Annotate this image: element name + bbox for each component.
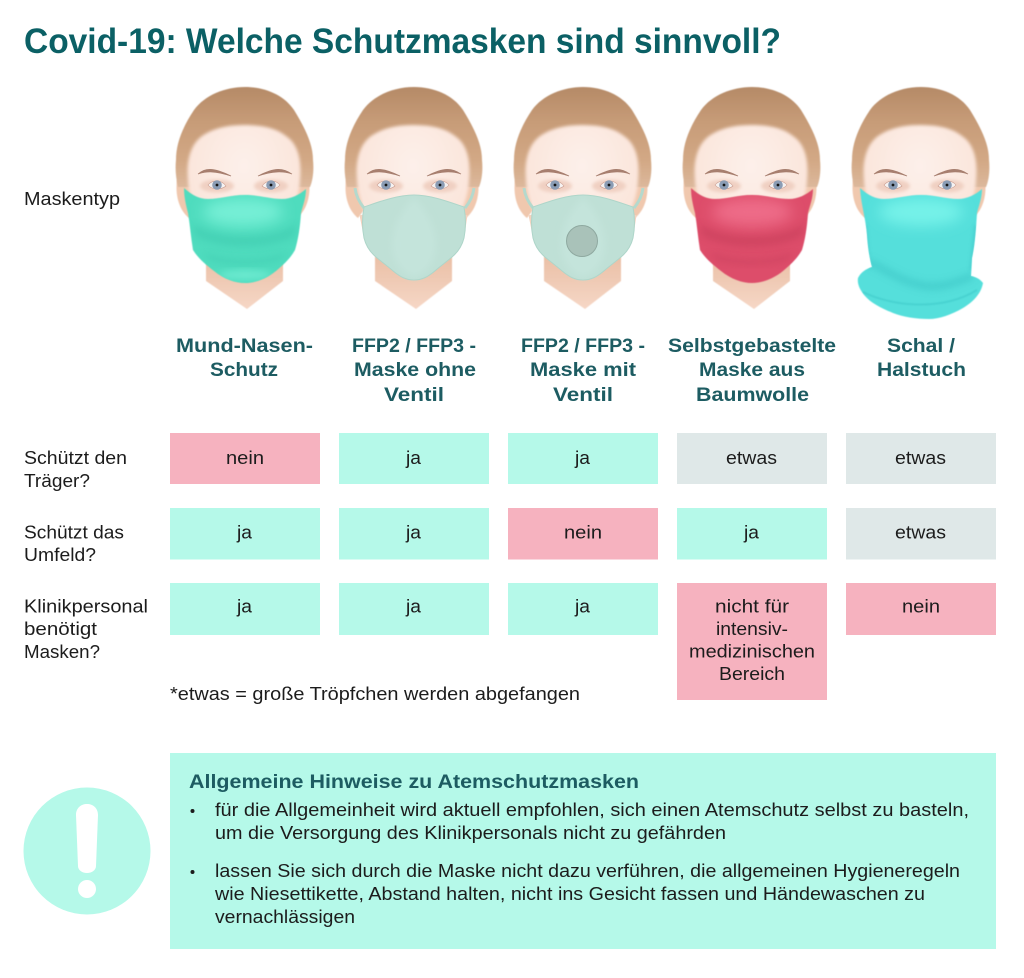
column label: Schal / Halstuch: Halstuch [877, 359, 966, 381]
illustration: face with FFP mask without valve [345, 87, 482, 309]
table row: Schützt den Träger: etwas [726, 447, 777, 468]
table row: Schützt das Umfeld: ja [743, 522, 760, 542]
column label: FFP2 / FFP3 - Maske mit Ventil [521, 335, 645, 406]
bullet 1: um die Versorgung des Klinikpersonals nicht zu gefährden [215, 822, 726, 843]
icon: exclamation mark [24, 788, 150, 914]
table row: Klinikpersonal: medizinischen [689, 640, 815, 662]
row label: Klinikpersonal benötigt Masken?: benötigt [24, 618, 97, 639]
illustration: face with FFP mask with valve [514, 87, 651, 309]
bullet 2: lassen Sie sich durch die Maske nicht dazu verführen, die allgemeinen Hygieneregeln [215, 860, 960, 881]
row label: Maskentyp: Maskentyp [24, 188, 120, 209]
table row: Schützt das Umfeld: etwas [895, 522, 946, 542]
illustration: face with homemade cotton mask [683, 87, 820, 309]
row label: Klinikpersonal benötigt Masken? [24, 596, 148, 662]
bullet 1 [190, 799, 969, 843]
table row: Schützt den Träger: nein [226, 447, 264, 468]
table row: Klinikpersonal: nein [902, 596, 940, 616]
column label: FFP2 / FFP3 - Maske mit Ventil: Ventil [553, 384, 613, 406]
column label: FFP2 / FFP3 - Maske ohne Ventil: FFP2 / FFP3 - [352, 335, 476, 357]
table row: Schützt das Umfeld: ja [236, 522, 253, 542]
row label: Schützt den Träger?: Schützt den [24, 447, 127, 468]
column label: FFP2 / FFP3 - Maske ohne Ventil: Maske ohne [354, 359, 476, 381]
column label: Selbstgebastelte Maske aus Baumwolle: Maske aus [699, 359, 805, 381]
column label: Mund-Nasen-Schutz: Mund-Nasen- [176, 335, 313, 357]
panel heading: Allgemeine Hinweise zu Atemschutzmasken [189, 771, 639, 793]
table row: Klinikpersonal: intensiv- [716, 618, 788, 639]
column label: FFP2 / FFP3 - Maske mit Ventil: Maske mit [530, 359, 637, 381]
column label: Selbstgebastelte Maske aus Baumwolle: Baumwolle [696, 384, 809, 406]
column label: FFP2 / FFP3 - Maske ohne Ventil [352, 335, 476, 406]
title: Covid-19: Welche Schutzmasken sind sinnvoll? [24, 21, 781, 61]
column label: Mund-Nasen-Schutz: Schutz [210, 359, 278, 381]
icon: valve [566, 226, 598, 256]
row label: Schützt das Umfeld?: Schützt das [24, 522, 124, 542]
column label: Schal / Halstuch: Schal / [887, 335, 956, 357]
bullet 2: vernachlässigen [215, 906, 355, 927]
row label: Klinikpersonal benötigt Masken?: Masken? [24, 641, 100, 662]
illustration: face with scarf [852, 87, 989, 319]
table row: Schützt den Träger: ja [405, 447, 422, 468]
row label: Schützt das Umfeld?: Umfeld? [24, 544, 96, 565]
table row: Schützt das Umfeld: ja [405, 522, 422, 542]
table row: Klinikpersonal: ja [574, 596, 591, 616]
table row: Schützt den Träger [170, 433, 996, 484]
row label: Schützt das Umfeld? [24, 522, 124, 565]
bullet 1: für die Allgemeinheit wird aktuell empfohlen, sich einen Atemschutz selbst zu basteln, [215, 799, 969, 820]
column label: Schal / Halstuch [877, 335, 966, 381]
table row: Klinikpersonal: ja [236, 596, 253, 616]
illustration: face with surgical mask [176, 87, 313, 309]
footnote: *etwas = große Tröpfchen werden abgefangen [170, 683, 580, 704]
column label: Selbstgebastelte Maske aus Baumwolle [668, 335, 836, 406]
table row: Schützt den Träger: etwas [895, 447, 946, 468]
column label: FFP2 / FFP3 - Maske ohne Ventil: Ventil [384, 384, 444, 406]
table row: Klinikpersonal: ja [405, 596, 422, 616]
column label: Selbstgebastelte Maske aus Baumwolle: Selbstgebastelte [668, 335, 836, 357]
table row: Schützt das Umfeld [170, 508, 996, 560]
table row: Schützt den Träger: ja [574, 447, 591, 468]
table row: Klinikpersonal: nicht für [715, 596, 789, 616]
column label: FFP2 / FFP3 - Maske mit Ventil: FFP2 / FFP3 - [521, 335, 645, 357]
row label: Schützt den Träger?: Träger? [24, 470, 90, 491]
column label: Mund-Nasen-Schutz [176, 335, 313, 381]
table row: Schützt das Umfeld: nein [564, 522, 602, 542]
table row: Klinikpersonal: Bereich [719, 663, 785, 684]
bullet 2: wie Niesettikette, Abstand halten, nicht ins Gesicht fassen und Händewaschen zu [214, 883, 925, 904]
row label: Schützt den Träger? [24, 447, 127, 491]
row label: Klinikpersonal benötigt Masken?: Klinikpersonal [24, 596, 148, 616]
table row: Klinikpersonal [170, 583, 996, 700]
bullet 2 [190, 860, 960, 927]
panel: general notes [170, 753, 996, 949]
